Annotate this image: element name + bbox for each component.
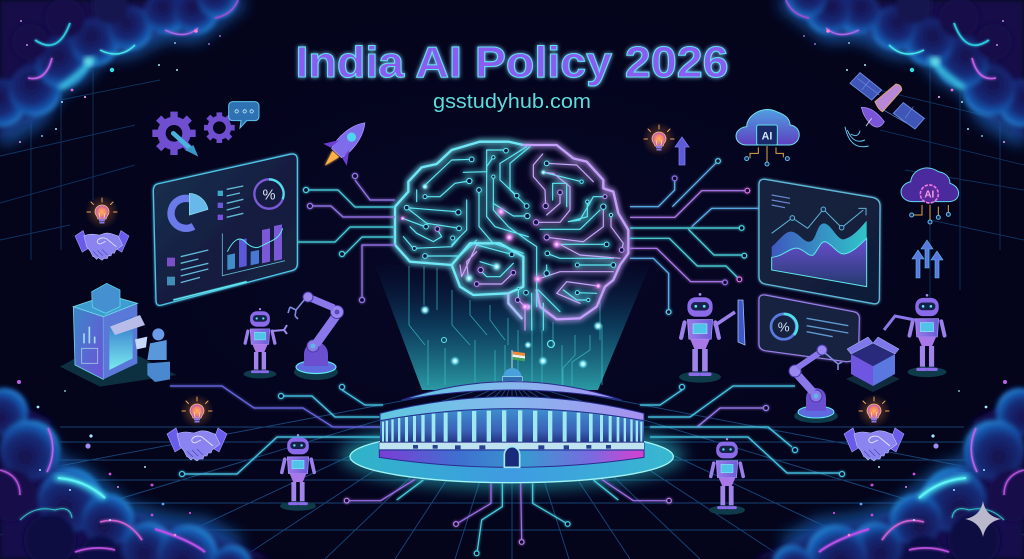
legend lines xyxy=(218,186,243,220)
nebula cloud: bottom right xyxy=(752,380,1024,559)
flag xyxy=(512,350,525,368)
percent gauge: % xyxy=(262,187,276,203)
small percent panel right xyxy=(759,295,859,362)
icon: chat bubble xyxy=(229,102,259,128)
right wires: brain to charts xyxy=(630,159,765,314)
robotic arm left xyxy=(288,292,344,380)
hologram light nodes xyxy=(420,303,603,369)
brain circuit xyxy=(395,142,628,330)
open box xyxy=(846,337,900,392)
satellite icon xyxy=(845,73,924,147)
robot bottom right xyxy=(709,438,745,515)
glowing platform xyxy=(350,431,673,483)
icon: gears with wrench xyxy=(152,102,259,157)
colonnade xyxy=(380,408,644,445)
left wires: dashboard to brain xyxy=(293,174,395,302)
circuit traces in hologram xyxy=(409,266,602,385)
nebula cloud: top left xyxy=(0,0,242,143)
main roof band xyxy=(380,397,644,421)
AI cloud gear icon xyxy=(901,168,959,224)
floor grid xyxy=(0,380,1024,559)
AI cloud gear icon: AI xyxy=(924,190,935,201)
donut chart xyxy=(166,193,208,234)
AI cloud chip icon: AI xyxy=(762,130,772,142)
seated robot at laptop xyxy=(135,328,170,382)
nebula cloud: bottom left xyxy=(0,380,272,559)
robot with robotic hand left xyxy=(244,308,287,378)
lower base with windows xyxy=(379,443,644,467)
floor wires xyxy=(170,384,844,476)
up arrows xyxy=(912,240,943,278)
robot at box right xyxy=(884,294,946,377)
arched door xyxy=(504,447,520,467)
robotic arm right xyxy=(789,345,842,423)
nebula cloud: top right xyxy=(782,0,1024,143)
subtitle: website: gsstudyhub.com xyxy=(433,91,591,113)
hologram light cone xyxy=(375,265,650,390)
percent gauge xyxy=(254,179,284,209)
platform glow xyxy=(340,421,684,489)
storefront with robot xyxy=(60,283,177,387)
AI cloud chip icon xyxy=(736,110,799,166)
platform wires below xyxy=(344,479,671,556)
robot with tablet right xyxy=(679,293,745,383)
sparkle watermark xyxy=(965,501,1001,537)
icon: bulb and handshake bottom left xyxy=(167,394,227,461)
icon: bulb and handshake top left xyxy=(75,195,129,260)
brain traces xyxy=(403,147,613,330)
robot bottom left xyxy=(280,434,316,511)
dashboard panel left xyxy=(153,154,297,305)
small dome xyxy=(502,368,522,381)
text lines xyxy=(167,250,208,285)
small percent panel right: % xyxy=(778,320,790,335)
title: India AI Policy 2026 xyxy=(296,38,728,87)
dashboard panel right: line and area chart xyxy=(759,179,880,304)
icon: rocket xyxy=(313,112,377,177)
icon: bulb with up arrow xyxy=(642,122,689,165)
brain outline xyxy=(395,142,628,319)
bar and line chart xyxy=(222,224,285,276)
parliament building on platform xyxy=(350,350,673,483)
upper roof xyxy=(402,382,622,400)
icon: bulb and handshake bottom right xyxy=(844,394,904,461)
upper wall grids xyxy=(0,50,1024,300)
brain nodes xyxy=(404,148,624,302)
